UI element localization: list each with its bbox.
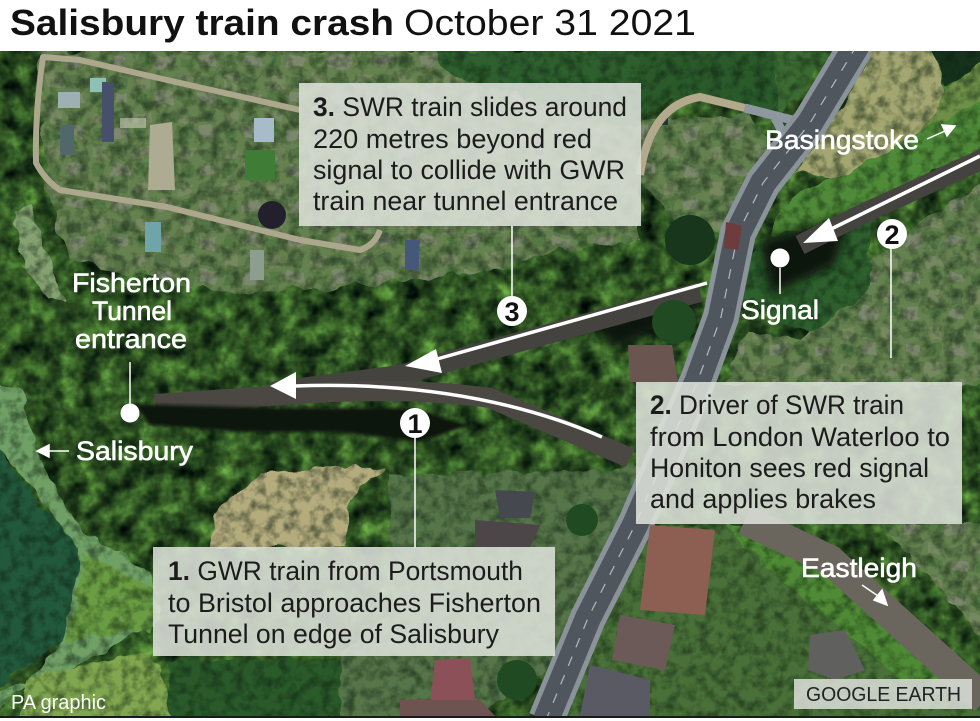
place labels: Signal xyxy=(741,295,819,325)
road xyxy=(546,45,857,720)
callout number 2: 2 xyxy=(884,220,900,250)
panel: step 2: Honiton sees red signal xyxy=(650,453,929,483)
arrow: GWR train xyxy=(270,372,602,437)
credit: Google Earth xyxy=(794,679,972,709)
place labels: Basingstoke xyxy=(765,125,919,155)
marker: tunnel entrance xyxy=(120,404,140,422)
panel: step 2: 2. Driver of SWR train xyxy=(650,390,904,420)
callout number 3 xyxy=(497,296,527,327)
arrow: SWR slide xyxy=(405,283,707,373)
marker: signal xyxy=(770,248,790,268)
title xyxy=(10,2,696,43)
place labels: entrance xyxy=(75,324,187,354)
panel: step 1: 1. GWR train from Portsmouth xyxy=(168,556,523,586)
railway xyxy=(800,158,980,245)
panel: step 1: to Bristol approaches Fisherton xyxy=(168,588,541,618)
callout number 1: 1 xyxy=(407,409,423,439)
direction arrows xyxy=(37,125,955,605)
shadows beside railway xyxy=(600,215,850,350)
credit: PA graphic: PA graphic xyxy=(11,692,106,714)
title: Salisbury train crash xyxy=(10,2,394,43)
place labels: Tunnel xyxy=(92,296,172,326)
panel: step 1 xyxy=(153,547,555,656)
leader lines xyxy=(130,226,891,548)
panel: step 3: signal to collide with GWR xyxy=(313,155,625,185)
panel: step 2: from London Waterloo to xyxy=(650,422,950,452)
place labels: Salisbury xyxy=(76,436,194,466)
allotment features xyxy=(58,78,668,280)
title: October 31 2021 xyxy=(404,2,696,43)
arrow: SWR track xyxy=(803,156,980,243)
panel: step 3 xyxy=(299,83,641,226)
panel: step 3: 220 metres beyond red xyxy=(313,124,592,154)
allotment tracks xyxy=(36,57,380,250)
callout number 2 xyxy=(877,219,907,250)
place labels: Eastleigh xyxy=(801,553,917,583)
panel: step 2: and applies brakes xyxy=(650,484,876,514)
trees xyxy=(497,215,715,700)
panel: step 1: Tunnel on edge of Salisbury xyxy=(168,619,499,649)
place labels: Fisherton xyxy=(72,268,191,298)
callout number 3: 3 xyxy=(504,297,520,327)
place labels xyxy=(72,125,919,583)
panel: step 2 xyxy=(636,382,962,524)
panel: step 3: train near tunnel entrance xyxy=(313,186,618,216)
callout number 1 xyxy=(400,408,430,439)
map bottom edge xyxy=(0,716,980,718)
credit: Google Earth: GOOGLE EARTH xyxy=(806,684,961,706)
panel: step 3: 3. SWR train slides around xyxy=(313,92,627,122)
houses xyxy=(400,222,865,716)
